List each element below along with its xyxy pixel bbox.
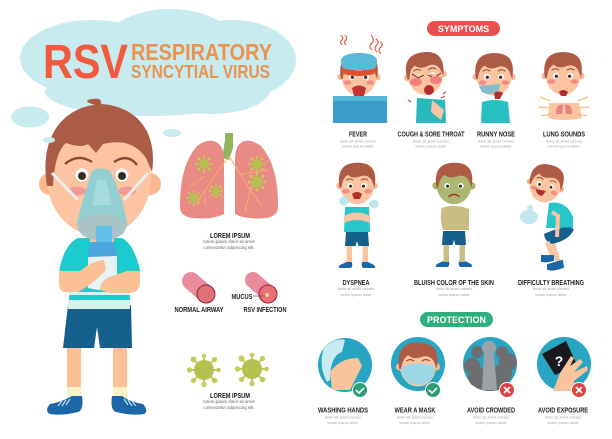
symptom: difficulty breathing: lorem ipsum dolor: [536, 292, 567, 297]
virus caption: [203, 391, 256, 410]
head: [39, 99, 161, 236]
protection: avoid exposure: [537, 337, 591, 425]
RSV infection airway: MUCUS: [232, 292, 253, 301]
symptom: fever: FEVER: [349, 130, 368, 138]
protection: washing hands: [318, 338, 372, 425]
virus caption: LOREM IPSUM: [210, 391, 250, 400]
lungs caption: LOREM IPSUM: [210, 231, 250, 240]
protection heading: [420, 312, 493, 327]
title: RSV: [43, 36, 128, 89]
symptom: fever: lorem ipsum dolor: [343, 144, 374, 148]
protection: avoid crowded: [463, 337, 517, 425]
symptom: bluish color of the skin: [414, 163, 494, 297]
symptom: lung sounds: dolor sit amet consec: [546, 138, 582, 144]
symptoms heading: SYMPTOMS: [438, 24, 489, 34]
tube and bottle: [88, 226, 117, 290]
symptom: fever: dolor sit amet consec: [340, 138, 376, 144]
protection: avoid exposure: AVOID EXPOSURE: [538, 406, 588, 414]
protection: washing hands: dolor sit amet consec: [325, 414, 361, 420]
protection: avoid crowded: AVOID CROWDED: [467, 406, 515, 414]
symptom: fever: [333, 35, 387, 148]
protection: avoid exposure: ?: [555, 353, 563, 369]
symptom: difficulty breathing: dolor sit amet consec: [533, 286, 569, 291]
main boy with oxygen mask: [39, 99, 161, 415]
symptom: runny nose: RUNNY NOSE: [477, 130, 515, 138]
protection: avoid exposure: dolor sit amet consec: [545, 414, 581, 420]
symptom: cough and sore throat: COUGH & SORE THROAT: [398, 130, 465, 138]
lungs: [180, 133, 278, 218]
symptom: bluish color of the skin: dolor sit amet consec: [436, 286, 472, 291]
neck: [90, 228, 114, 242]
symptom: cough and sore throat: dolor sit amet consec: [413, 138, 449, 144]
symptom: dyspnea: lorem ipsum dolor: [341, 292, 372, 297]
arms and hands: [59, 260, 140, 293]
virus caption: consectetur adipiscing elit.: [203, 405, 255, 410]
title: SYNCYTIAL VIRUS: [131, 62, 270, 82]
protection: washing hands: WASHING HANDS: [318, 406, 368, 414]
normal airway: NORMAL AIRWAY: [174, 305, 224, 314]
protection: wear a mask: dolor sit amet consec: [397, 414, 433, 420]
title: RESPIRATORY: [131, 39, 272, 65]
symptom: lung sounds: lorem ipsum dolor: [549, 144, 580, 148]
symptom: difficulty breathing: [518, 160, 584, 297]
RSV infection airway: [232, 280, 286, 314]
protection: avoid crowded: dolor sit amet consec: [473, 414, 509, 420]
symptom: cough and sore throat: [398, 50, 465, 149]
symptom: lung sounds: [538, 52, 590, 148]
protection: wear a mask: [391, 337, 445, 425]
shorts: [63, 305, 132, 348]
oxygen mask: [52, 168, 148, 240]
legs and shoes: [47, 345, 146, 415]
protection heading: PROTECTION: [427, 315, 486, 325]
protection: wear a mask: WEAR A MASK: [394, 406, 436, 414]
symptom: dyspnea: DYSPNEA: [342, 278, 370, 287]
symptom: dyspnea: dolor sit amet consec: [338, 286, 374, 291]
title: [43, 36, 272, 89]
symptoms heading: [427, 21, 500, 36]
symptom: cough and sore throat: lorem ipsum dolor: [416, 144, 447, 148]
virus icons: [187, 353, 269, 387]
symptom: lung sounds: LUNG SOUNDS: [543, 130, 585, 138]
symptom: difficulty breathing: DIFFICULTY BREATHING: [518, 278, 584, 287]
symptom: dyspnea: [336, 163, 379, 297]
symptom: runny nose: lorem ipsum dolor: [481, 144, 512, 148]
protection: avoid crowded: lorem ipsum dolor: [476, 420, 507, 425]
protection: avoid exposure: lorem ipsum dolor: [548, 420, 579, 425]
virus caption: lorem ipsum dolor sit amet: [203, 399, 256, 404]
lungs caption: lorem ipsum dolor sit amet: [203, 239, 256, 244]
symptom: bluish color of the skin: lorem ipsum dolor: [439, 292, 470, 297]
teal shirt: [59, 238, 140, 300]
normal airway: [174, 281, 224, 314]
RSV infection airway: RSV INFECTION: [244, 305, 286, 314]
thought cloud: [11, 9, 296, 137]
lungs caption: consectetur adipiscing elit.: [203, 245, 255, 250]
symptom: runny nose: [473, 53, 515, 148]
protection: washing hands: lorem ipsum dolor: [328, 420, 359, 425]
protection: wear a mask: lorem ipsum dolor: [400, 420, 431, 425]
symptom: bluish color of the skin: BLUISH COLOR OF THE SKIN: [414, 278, 494, 287]
lungs caption: [203, 231, 256, 250]
symptom: runny nose: dolor sit amet consec: [478, 138, 514, 144]
